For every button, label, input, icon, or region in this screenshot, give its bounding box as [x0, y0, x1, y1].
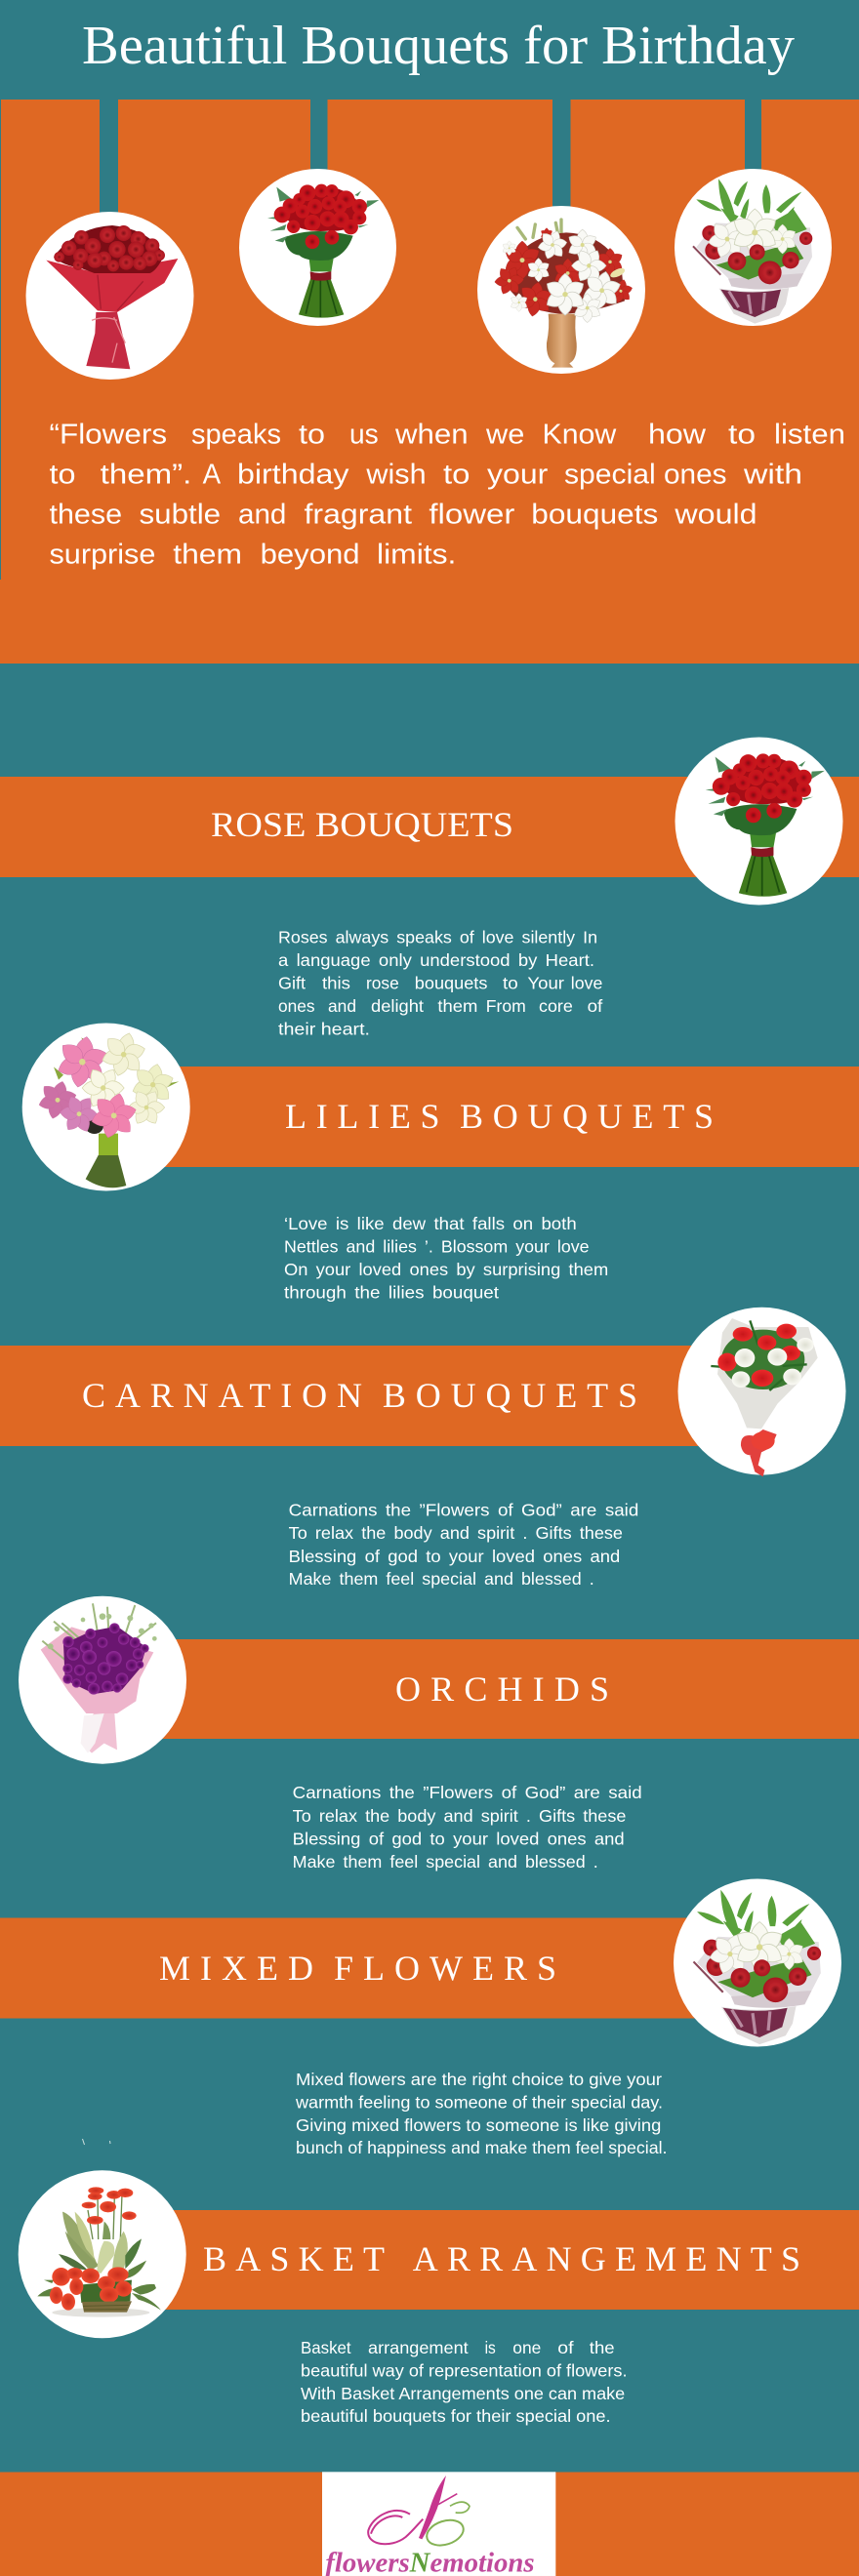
description: delight [371, 996, 424, 1016]
intro text: we [485, 420, 524, 451]
intro text: subtle [139, 500, 221, 531]
description: Carnations the ”Flowers of God” are said [293, 1783, 642, 1802]
description: them [437, 996, 477, 1016]
description: Blessing of god to your loved ones and [293, 1830, 625, 1849]
icon: orchid bouquet [19, 1596, 186, 1764]
description: Giving mixed flowers to someone is like giving [296, 2115, 661, 2135]
description: core [539, 996, 573, 1016]
icon: mixed bouquet [674, 1879, 841, 2047]
intro text: us [349, 420, 379, 451]
description: Gift [278, 973, 306, 992]
description [284, 1214, 608, 1302]
intro text: beyond [261, 540, 360, 571]
icon: wrapped red rose bouquet [25, 212, 193, 380]
description: arrangement [368, 2338, 469, 2357]
description: love [571, 973, 602, 992]
orange intro panel [0, 100, 859, 664]
intro text: birthday [237, 459, 349, 490]
icon: lilies in gold vase [477, 206, 645, 374]
band [0, 1346, 761, 1446]
intro text: bouquets [531, 500, 658, 531]
panel: orchids [19, 1596, 859, 1872]
description [289, 1501, 638, 1589]
description: and [328, 996, 356, 1016]
description: of [588, 996, 602, 1016]
band [0, 1918, 761, 2018]
description: Blessing of god to your loved ones and [289, 1547, 620, 1566]
intro text: how [648, 420, 706, 451]
heading: CARNATION BOUQUETS [82, 1376, 637, 1415]
icon: carnation bouquet [677, 1308, 845, 1476]
panel: lilies bouquets [22, 1023, 859, 1302]
footer band [0, 2473, 859, 2576]
logo [322, 2472, 555, 2576]
description: From [486, 996, 526, 1016]
band [0, 777, 859, 877]
hanging ribbons [100, 98, 761, 213]
description: Mixed flowers are the right choice to give your [296, 2070, 662, 2089]
description: beautiful way of representation of flowers. [301, 2361, 627, 2381]
intro text: limits. [377, 540, 456, 571]
description: a language only understood by Heart. [278, 950, 594, 970]
panel: mixed flowers [0, 1879, 841, 2157]
intro text: when [394, 420, 469, 451]
intro text: to [49, 459, 76, 490]
intro text: special [564, 459, 656, 490]
description: ‘Love is like dew that falls on both [284, 1214, 577, 1233]
description: To relax the body and spirit . Gifts these [293, 1806, 626, 1826]
description: beautiful bouquets for their special one. [301, 2406, 611, 2426]
intro text: “Flowers [49, 420, 167, 451]
intro text: speaks [191, 420, 281, 451]
heading: LILIES BOUQUETS [285, 1097, 714, 1136]
panel: rose bouquets [0, 738, 859, 1038]
description: Basket [301, 2338, 351, 2357]
intro text: them”. [101, 459, 191, 490]
panel: carnation bouquets [0, 1308, 845, 1589]
intro text: would [674, 500, 757, 531]
description: bouquets [415, 973, 488, 992]
intro text: these [49, 500, 122, 531]
intro text: flower [429, 500, 515, 531]
heading: BASKET ARRANGEMENTS [203, 2239, 800, 2278]
intro text [49, 420, 845, 571]
band [98, 2210, 859, 2310]
intro text: listen [774, 420, 845, 451]
description [278, 927, 602, 1038]
icon: red rose bunch [239, 169, 396, 326]
description [293, 1783, 642, 1872]
intro text: A [203, 459, 221, 490]
intro text: ones [664, 459, 726, 490]
description: ones [278, 996, 315, 1016]
intro text: wish [365, 459, 427, 490]
description: one [512, 2338, 541, 2357]
description: of [557, 2338, 574, 2357]
description: Make them feel special and blessed . [293, 1852, 598, 1872]
icon: rose bouquet [675, 738, 843, 906]
description: warmth feeling to someone of their special day. [295, 2092, 663, 2112]
intro text: them [173, 540, 242, 571]
title: Beautiful Bouquets for Birthday [82, 16, 795, 76]
description: With Basket Arrangements one can make [301, 2384, 625, 2403]
description: Make them feel special and blessed . [289, 1569, 594, 1589]
intro text: your [487, 459, 549, 490]
band [98, 1067, 859, 1167]
description: the [590, 2338, 615, 2357]
intro text: to [299, 420, 325, 451]
description: through the lilies bouquet [284, 1282, 499, 1302]
description: rose [366, 973, 399, 992]
description: their heart. [278, 1019, 370, 1038]
intro text: surprise [49, 540, 155, 571]
description: Roses always speaks of love silently In [278, 927, 597, 946]
description: bunch of happiness and make them feel special. [296, 2138, 668, 2157]
heading: MIXED FLOWERS [159, 1949, 556, 1988]
heading: ORCHIDS [395, 1670, 609, 1709]
description [295, 2070, 668, 2157]
intro text: fragrant [305, 500, 412, 531]
band [98, 1639, 859, 1739]
heading: ROSE BOUQUETS [211, 805, 513, 844]
description [301, 2338, 627, 2426]
icon: lilies bouquet [22, 1023, 190, 1190]
description: to [503, 973, 518, 992]
icon: basket arrangement [19, 2170, 186, 2338]
intro text: to [443, 459, 470, 490]
description: is [485, 2338, 496, 2357]
description: Your [527, 973, 564, 992]
intro text: Know [543, 420, 617, 451]
intro text: and [238, 500, 286, 531]
intro text: to [728, 420, 756, 451]
panel: footer [0, 2472, 859, 2576]
description: Carnations the ”Flowers of God” are said [289, 1501, 638, 1520]
icon: mixed lily and rose bouquet [675, 169, 832, 326]
panel: basket arrangements [19, 2170, 859, 2426]
description: To relax the body and spirit . Gifts these [289, 1523, 623, 1543]
panel: header and intro [0, 16, 859, 664]
intro text: with [743, 459, 802, 490]
description: On your loved ones by surprising them [284, 1260, 608, 1279]
description: Nettles and lilies ’. Blossom your love [284, 1237, 590, 1257]
description: this [322, 973, 350, 992]
